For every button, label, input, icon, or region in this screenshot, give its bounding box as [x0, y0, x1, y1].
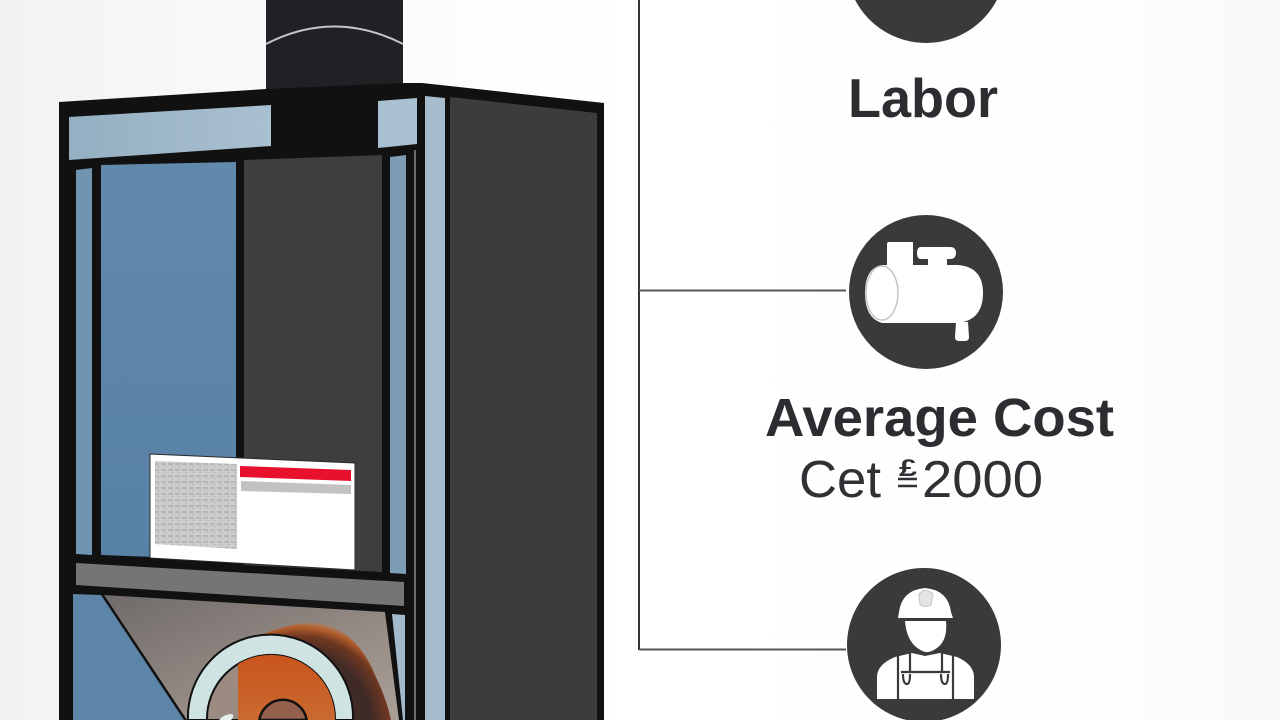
blower hood — [104, 595, 399, 720]
cost value — [799, 451, 1043, 509]
lower right channel — [392, 614, 405, 720]
right narrow channel — [390, 155, 406, 574]
worker face — [905, 621, 946, 652]
heading: Average Cost: Average Cost — [765, 388, 1114, 448]
label fine print — [155, 461, 237, 549]
dark interior panel — [244, 155, 382, 572]
compressor tank end — [866, 266, 898, 320]
currency glyph: £ — [899, 455, 918, 482]
label red bar — [240, 466, 351, 481]
blower hub — [259, 700, 307, 720]
compressor motor block — [887, 242, 913, 268]
compressor tank — [865, 265, 983, 323]
blue interior panel — [101, 162, 236, 560]
lower blue chamber — [73, 594, 184, 720]
blower flame glow — [238, 654, 335, 720]
shelf divider — [76, 563, 404, 606]
heading: Labor: Labor — [848, 67, 998, 129]
cost amount: 2000 — [922, 451, 1043, 509]
icon: worker — [847, 568, 1001, 720]
rating label — [150, 454, 355, 570]
hard hat ridge — [919, 590, 933, 606]
compressor drain — [955, 322, 969, 341]
blower interior — [207, 655, 335, 720]
thin frame highlight — [414, 150, 416, 720]
hard hat — [898, 588, 953, 618]
side panel — [450, 97, 597, 720]
blower blade tip — [219, 714, 233, 720]
label gray bar — [241, 481, 351, 494]
cost value: Cet — [799, 451, 882, 509]
top circle icon — [855, 0, 997, 43]
left narrow channel — [76, 168, 92, 555]
top band left — [69, 105, 271, 160]
worker body with overalls — [877, 653, 974, 699]
furnace illustration — [59, 0, 604, 720]
overall straps and buckles — [898, 653, 953, 699]
currency underline — [898, 479, 917, 486]
connector lines — [639, 0, 846, 650]
top band right — [378, 98, 417, 148]
corner column — [425, 96, 445, 720]
blower housing arch — [263, 623, 391, 720]
icon: air compressor — [849, 215, 1003, 369]
chimney flue — [266, 0, 403, 92]
compressor handle — [917, 247, 956, 268]
cabinet outer frame — [59, 83, 604, 720]
blower ring — [188, 635, 353, 720]
